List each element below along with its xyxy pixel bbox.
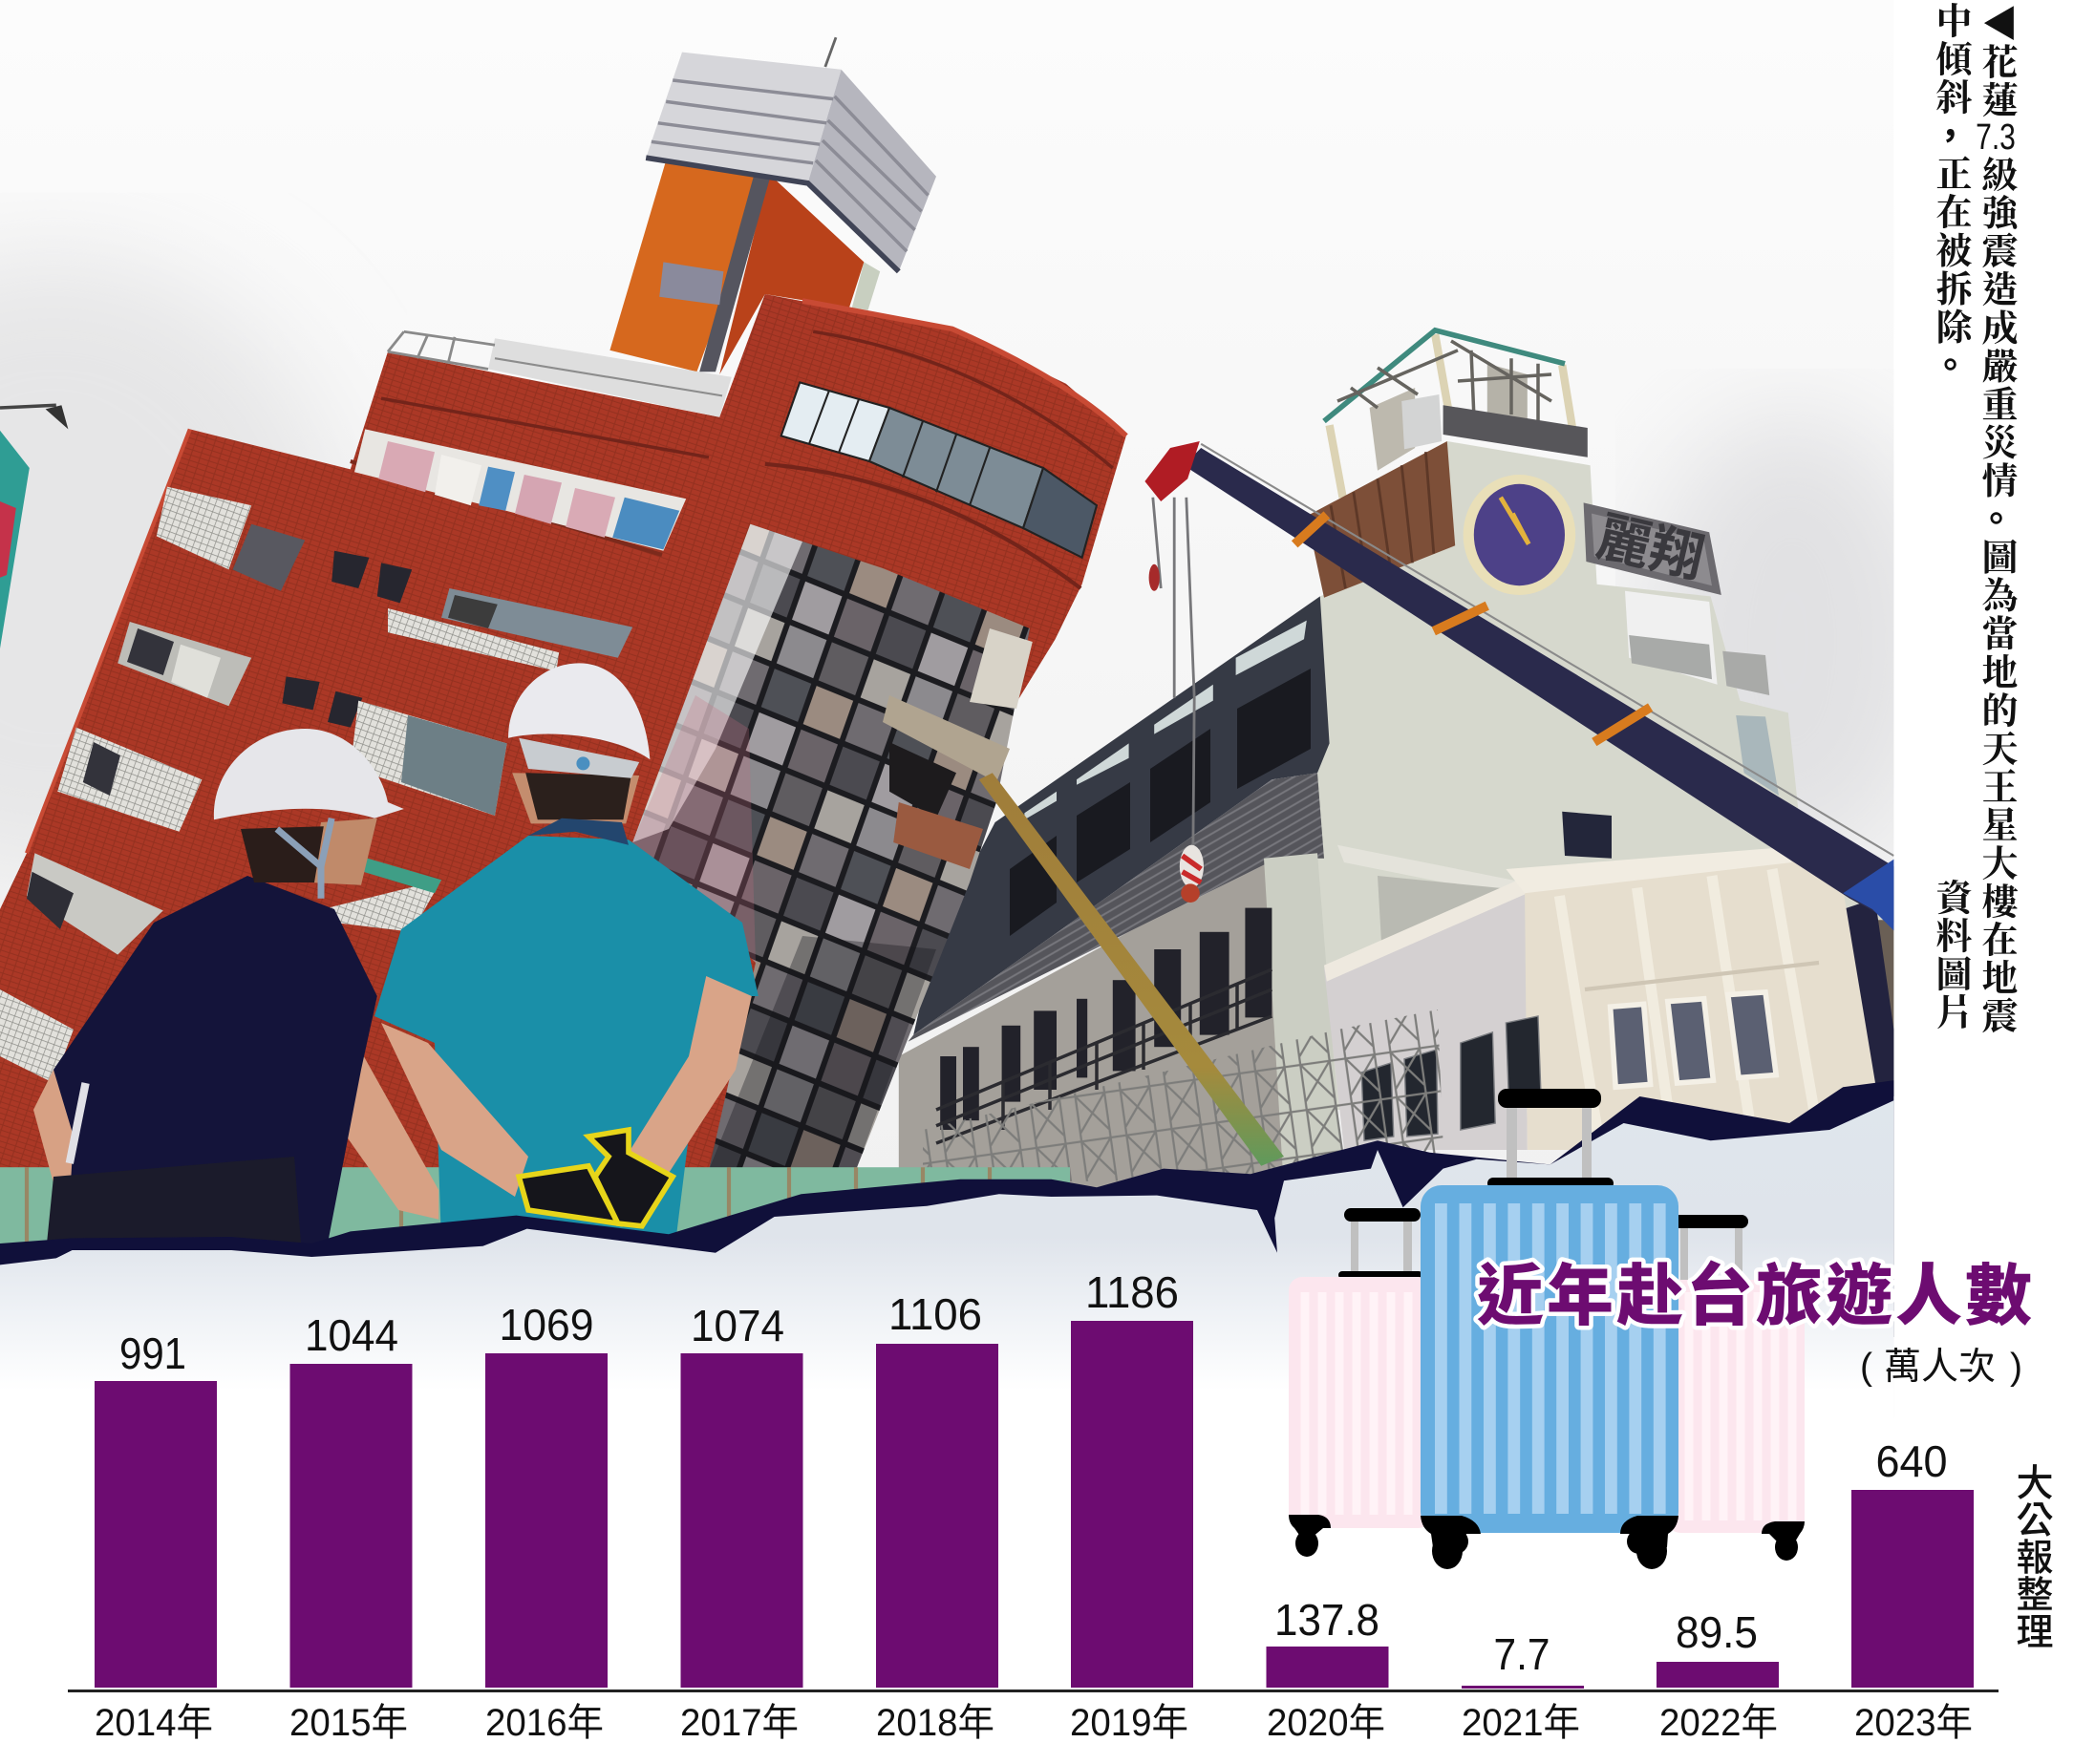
collar: [528, 818, 629, 845]
curved window strip: [781, 382, 1097, 558]
clock tower and right building: [899, 330, 1893, 1190]
upper windows: [1010, 669, 1311, 936]
bar chart: [68, 1267, 1999, 1744]
suitcase right pink: [1667, 1215, 1805, 1561]
dark upper floor: [913, 596, 1330, 1035]
roof sign: [1443, 405, 1588, 457]
crane: [1144, 441, 1895, 932]
year labels: 2022年: [1659, 1702, 1778, 1744]
cables: [1153, 498, 1194, 856]
blue joint: [1843, 859, 1895, 932]
sky: [0, 202, 1893, 1167]
year labels: 2017年: [680, 1702, 799, 1744]
diagonal support strut: [979, 773, 1284, 1166]
chart title: 近年赴台旅遊人數: [1477, 1243, 2035, 1339]
billboard and street lamp: [0, 405, 68, 648]
photo caption first column: ◀花蓮 7.3 級強震造成嚴重災情 。 圖為當地的天王星大樓在地震: [1970, 5, 2022, 1035]
tower shaft: [609, 160, 880, 374]
brick body: [0, 294, 1126, 1183]
bag: [47, 1157, 301, 1243]
bars: [95, 1321, 1974, 1689]
torn edge light: [0, 1100, 1893, 1417]
body: [53, 876, 377, 1243]
arms: [381, 976, 752, 1197]
value labels: [119, 1267, 1947, 1679]
metal canopy: [1337, 845, 1515, 940]
value labels: 7.7: [1494, 1629, 1550, 1679]
photo: tilted building and workers: [0, 0, 1939, 1417]
hook: [1149, 564, 1204, 903]
year labels: 2021年: [1462, 1702, 1580, 1744]
worker left: [33, 729, 438, 1243]
helmet band: [519, 738, 639, 778]
gloves: [519, 1130, 673, 1226]
railings: [936, 969, 1272, 1143]
glass facade: [632, 524, 1033, 1170]
unit label: (: [1860, 1347, 1872, 1388]
clock: [1464, 475, 1575, 595]
annex: [1324, 848, 1876, 1150]
value labels: 89.5: [1676, 1607, 1758, 1657]
year labels: 2016年: [485, 1702, 604, 1744]
value labels: 1069: [499, 1300, 594, 1350]
roof slab and railing: [388, 331, 732, 417]
curved brick bands: [27, 301, 1126, 853]
left wing windows: [0, 487, 305, 1083]
year labels: 2018年: [876, 1702, 994, 1744]
worker right: [374, 663, 759, 1243]
tower top louvre: [646, 37, 936, 271]
orange straps: [1294, 515, 1651, 742]
year labels: 2023年: [1854, 1702, 1973, 1744]
wall: [1263, 441, 1893, 1110]
skylights: [1024, 621, 1307, 819]
centre balcony: [388, 588, 632, 671]
value labels: 1106: [888, 1289, 982, 1339]
bright panes: [632, 524, 802, 842]
value labels: 640: [1876, 1436, 1947, 1486]
annex windows: [1611, 992, 1776, 1087]
year labels: 2015年: [289, 1702, 408, 1744]
photo credit: 資料圖片: [1930, 879, 1970, 1031]
fence: [0, 1167, 1070, 1267]
value labels: 137.8: [1274, 1595, 1379, 1645]
photo caption second column: 中傾斜 ， 正在被拆除 。: [1924, 2, 1977, 385]
roof frame: [1324, 330, 1572, 498]
hard hat: [508, 663, 650, 759]
lower floors: [898, 865, 1282, 1188]
small dark windows: [282, 551, 412, 728]
crane head: [1144, 441, 1200, 501]
damaged floors: [883, 628, 1033, 869]
louvre band: [909, 773, 1324, 1042]
red building: [0, 294, 1126, 1183]
year labels: 2014年: [95, 1702, 213, 1744]
wood panel: [1307, 441, 1455, 598]
axis: [68, 1690, 1999, 1692]
suitcase left pink: [1289, 1208, 1432, 1557]
value labels: 1186: [1085, 1267, 1179, 1317]
arms: [33, 1056, 438, 1220]
value labels: 991: [119, 1328, 186, 1378]
source note: 大公報整理: [2011, 1463, 2052, 1649]
upper wing windows: [354, 429, 686, 551]
balcony: [1562, 591, 1779, 859]
value labels: 1074: [691, 1301, 784, 1350]
head: [241, 818, 377, 885]
head: [512, 773, 639, 823]
crane base: [1843, 899, 1893, 1096]
chin strap: [277, 818, 331, 899]
year labels: 2019年: [1070, 1702, 1188, 1744]
suitcase centre blue: [1421, 1089, 1678, 1569]
unit label: 萬人次: [1884, 1347, 1996, 1388]
shirt: [374, 836, 759, 1243]
torn edge dark: [0, 1080, 1893, 1337]
neon sign: 麗翔: [1592, 506, 1709, 588]
value labels: 1044: [305, 1310, 398, 1360]
year labels: 2020年: [1267, 1702, 1385, 1744]
boom: [1184, 448, 1893, 923]
hard hat: [214, 729, 404, 819]
lower grille windows: [328, 701, 507, 932]
balcony doors: [940, 908, 1272, 1130]
scaffold: [923, 1010, 1444, 1183]
year labels: [95, 1702, 1973, 1744]
unit label: ): [2010, 1347, 2022, 1388]
